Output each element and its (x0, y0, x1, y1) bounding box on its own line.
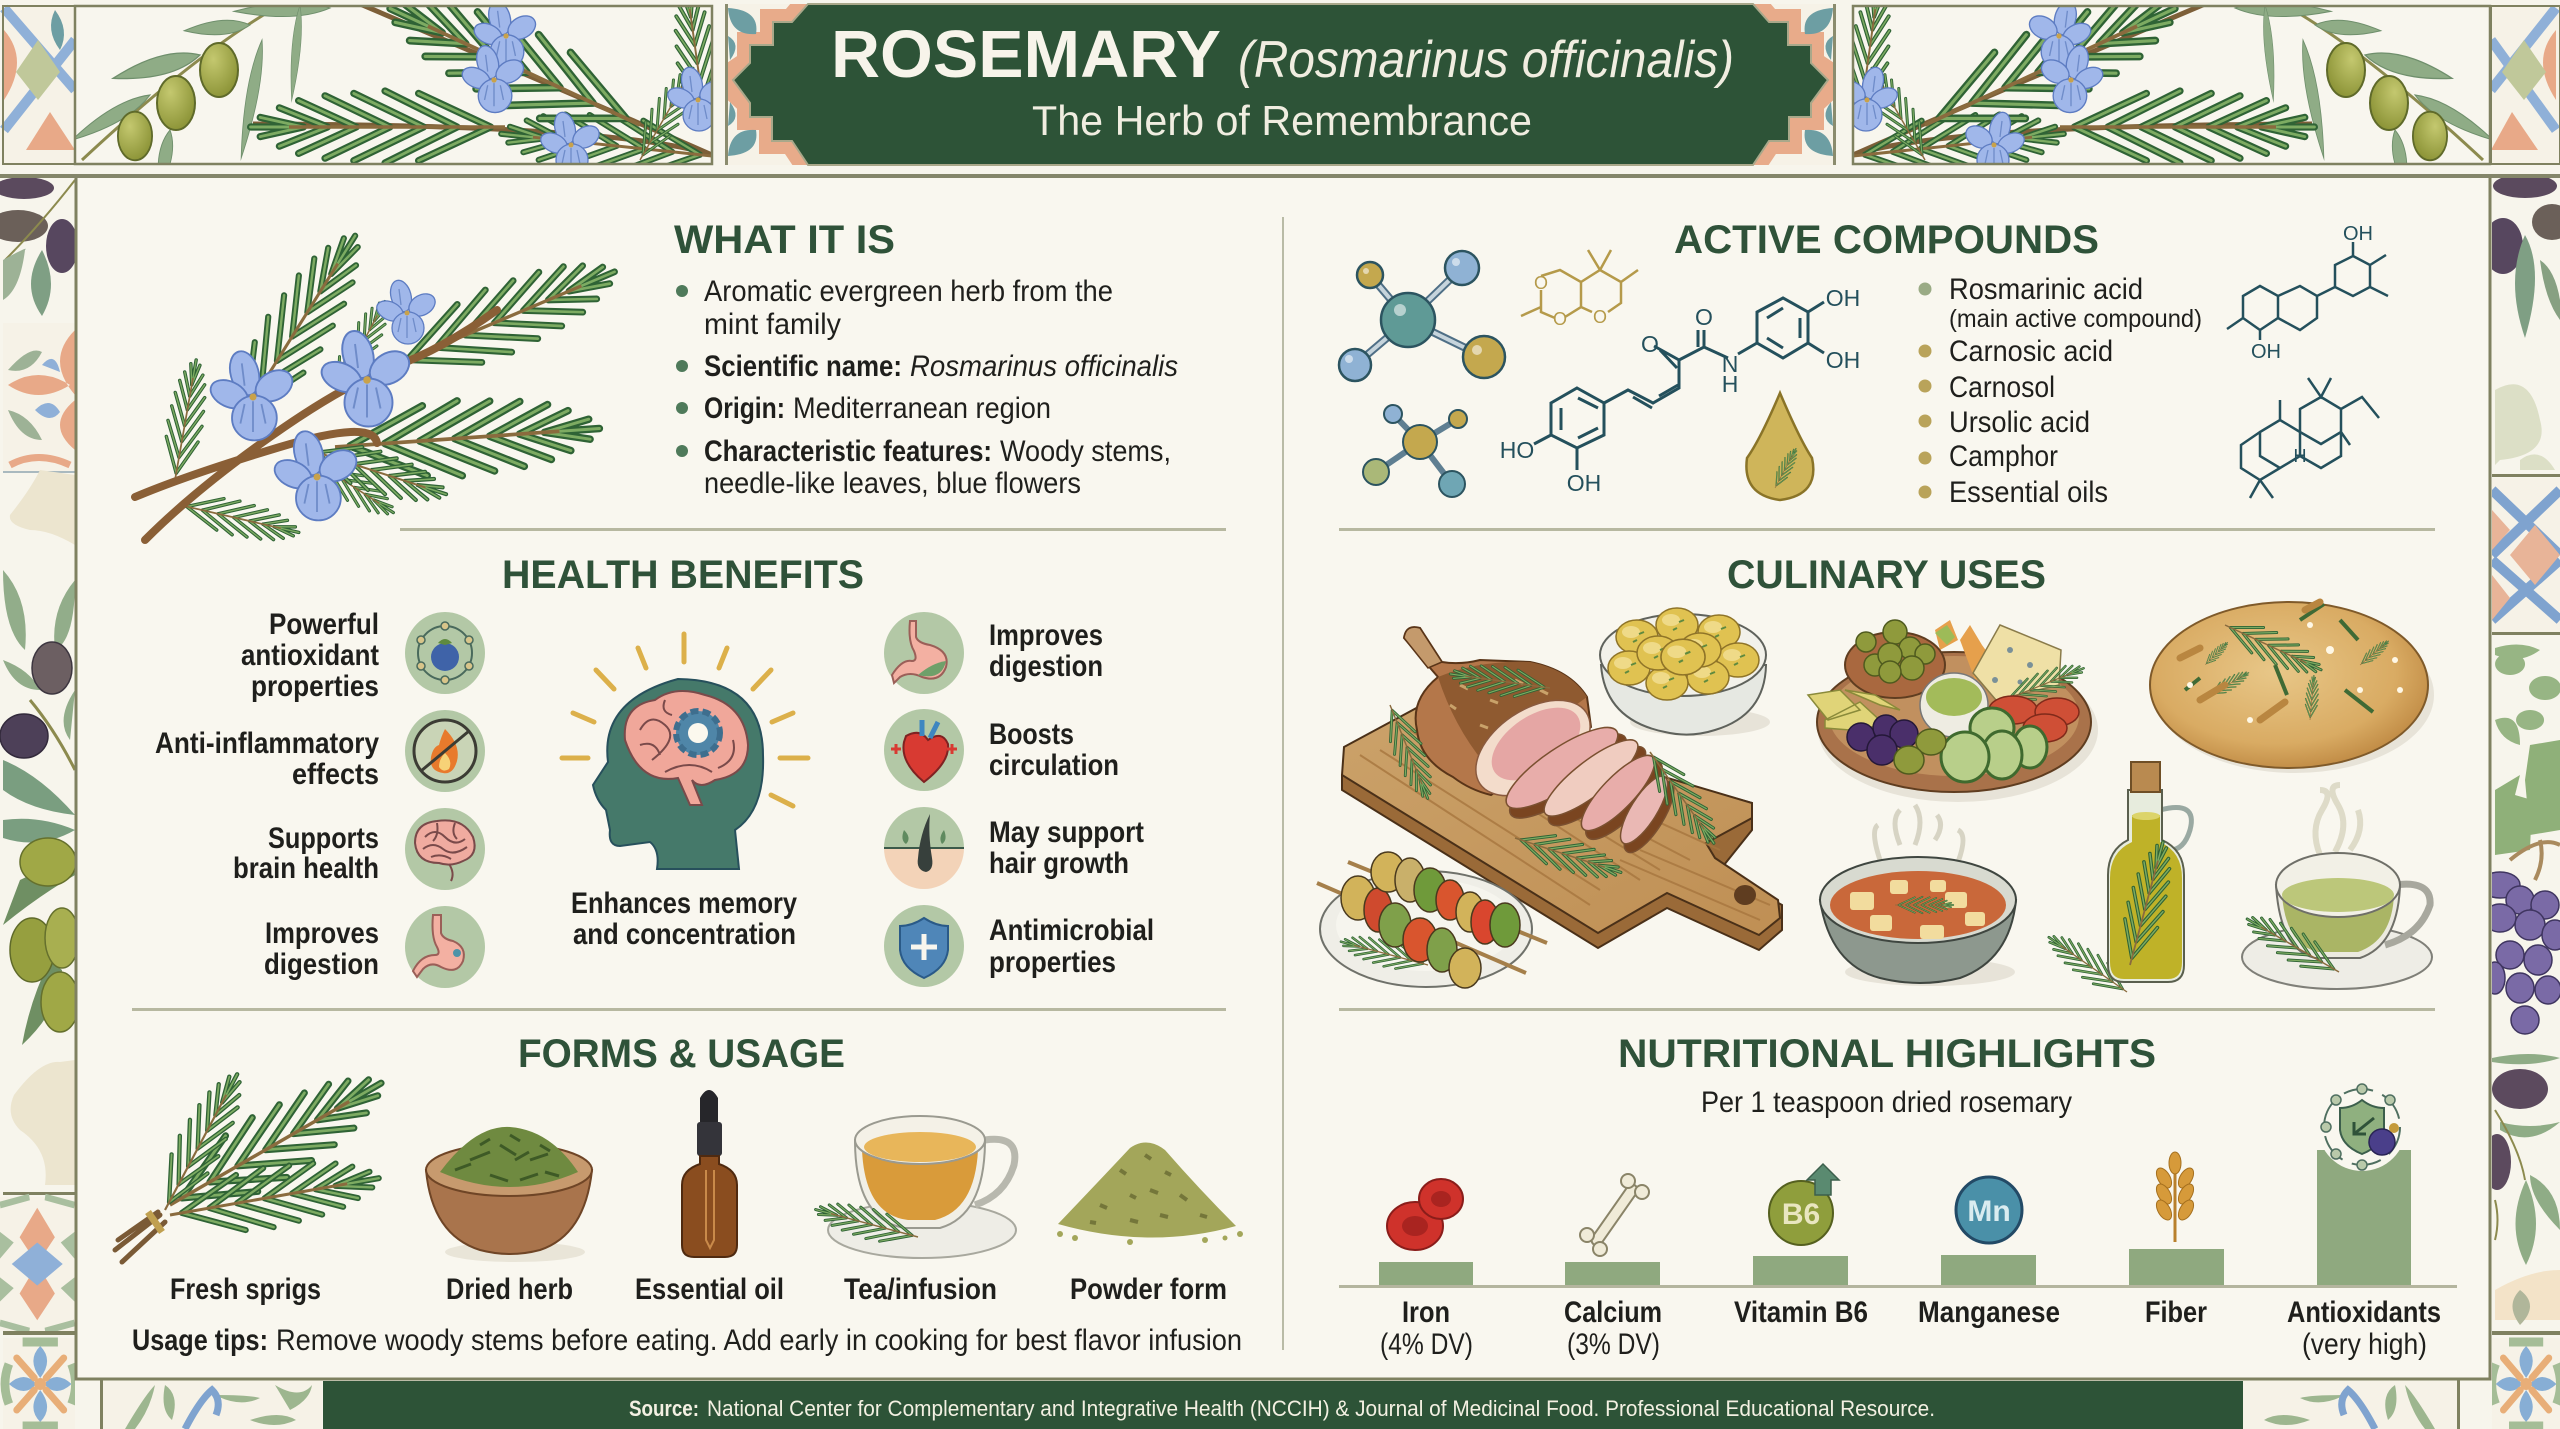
usage tips: Remove woody stems before eating. Add early in cooking for best flavor infusion (276, 1324, 1242, 1357)
icon: gold ring structure: O (1553, 309, 1567, 329)
icon: gold ring structure: O (1534, 273, 1548, 293)
icon: antioxidant berry (405, 612, 485, 694)
bullet list: needle-like leaves, blue flowers (704, 467, 1081, 500)
illustration: rosemary branch with blue flowers (135, 219, 628, 549)
title banner (733, 4, 1828, 165)
right benefit labels: Antimicrobial (989, 914, 1154, 947)
illustration: powder pile (1057, 1142, 1243, 1306)
icon: ursolic acid structure (2241, 378, 2379, 498)
illustration: roasted potatoes bowl (1600, 608, 1770, 736)
icon: heart (884, 709, 964, 791)
illustration: essential oil bottle (635, 1090, 784, 1306)
icon: hair follicle (884, 807, 964, 889)
compound list: Carnosol (1949, 371, 2055, 404)
icon: rosmarinic acid structure: HO (1500, 437, 1534, 463)
bottom band: source footer: Source: (629, 1396, 699, 1421)
header band: left ornamental tile (725, 3, 815, 165)
icon: rosmarinic acid structure: O (1641, 331, 1659, 357)
illustration: dried herb bowl: Dried herb (446, 1273, 573, 1306)
left benefit labels: Anti-inflammatory (155, 727, 379, 760)
right benefit labels: Improves (989, 619, 1103, 652)
compound list (1918, 273, 2202, 509)
header band: right rosemary and olive illustration (1835, 0, 2496, 190)
icon: stomach green (884, 612, 964, 694)
bar labels: (very high) (2302, 1328, 2427, 1361)
header band: right corner tile (2491, 6, 2560, 164)
right benefit labels: May support (989, 816, 1144, 849)
left benefit labels: antioxidant (241, 639, 379, 672)
icon: small ball-and-stick molecule (1363, 405, 1467, 497)
illustration: soup bowl (1820, 805, 2016, 986)
icon: shield with plus (884, 905, 964, 987)
right benefit labels (989, 619, 1154, 979)
icon: brain (405, 808, 485, 890)
icon: rosmarinic acid structure (1500, 285, 1860, 496)
icon: large ball-and-stick molecule (1339, 251, 1505, 381)
right benefit labels: circulation (989, 749, 1119, 782)
icon: rosmarinic acid structure: N (1722, 351, 1738, 377)
center: head with brain and gear (562, 634, 808, 869)
left benefit labels: Improves (265, 917, 379, 950)
bullet list: Characteristic features: (704, 435, 992, 468)
heading: FORMS & USAGE (518, 1032, 845, 1076)
bullet list: Woody stems, (1000, 435, 1171, 468)
right benefit labels: Boosts (989, 718, 1074, 751)
scientific name: (Rosmarinus officinalis) (1238, 31, 1734, 89)
center caption (571, 887, 797, 951)
icon: stomach (405, 906, 485, 988)
icon: flame crossed out (405, 710, 485, 792)
icon: red blood cells (1387, 1179, 1463, 1250)
heading: HEALTH BENEFITS (502, 553, 864, 597)
icon: rosmarinic acid structure: OH (1567, 470, 1601, 496)
right benefit labels: digestion (989, 650, 1103, 683)
usage tips: Usage tips: (132, 1324, 268, 1357)
bullet list: Scientific name: (704, 350, 902, 383)
bar labels: Vitamin B6 (1734, 1296, 1868, 1329)
bottom band: source footer: National Center for Complementary and Integrative Health (NCCIH) & Journal of Medicinal Food. Professional Educational Resource. (707, 1396, 1935, 1421)
icon: rosmarinic acid structure: OH (1826, 285, 1860, 311)
compound list: Rosmarinic acid (1949, 273, 2143, 306)
bullet list: Aromatic evergreen herb from the (704, 275, 1113, 308)
center caption: Enhances memory (571, 887, 797, 920)
compound list: Ursolic acid (1949, 406, 2090, 439)
center caption: and concentration (573, 918, 796, 951)
header band: left rosemary and olive illustration (69, 0, 730, 190)
bottom band: left leaf tile (100, 1380, 322, 1429)
bar labels: (3% DV) (1567, 1328, 1660, 1361)
icon: carnosic acid structure: OH (2251, 341, 2281, 363)
illustration: mediterranean platter (1808, 620, 2098, 802)
bar labels: Manganese (1918, 1296, 2060, 1329)
bar labels: Iron (1402, 1296, 1450, 1329)
compound list: Carnosic acid (1949, 335, 2113, 368)
bar labels: Antioxidants (2287, 1296, 2441, 1329)
main content panel (76, 176, 2490, 1379)
header band: left corner tile (3, 6, 75, 164)
bar labels (1380, 1296, 2441, 1361)
bullet list: Origin: (704, 392, 785, 425)
bullet list (676, 275, 1178, 500)
left benefit labels: digestion (264, 948, 379, 981)
illustration: essential oil bottle: Essential oil (635, 1273, 784, 1306)
icon: rosmarinic acid structure: O (1695, 304, 1713, 330)
icon: antioxidant shield and berry (2321, 1084, 2400, 1170)
bottom band: source footer (323, 1381, 2243, 1429)
left benefit labels: Supports (268, 822, 379, 855)
left benefit labels: effects (292, 758, 379, 791)
icon: rosmarinic acid structure: H (1722, 371, 1738, 397)
heading: NUTRITIONAL HIGHLIGHTS (1618, 1032, 2156, 1076)
left benefit labels: properties (251, 670, 379, 703)
left decorative border (0, 176, 79, 1429)
compound list: Camphor (1949, 440, 2058, 473)
illustration: fresh sprigs bundle: Fresh sprigs (170, 1273, 321, 1306)
heading: ACTIVE COMPOUNDS (1674, 218, 2099, 262)
icon: bone (1580, 1174, 1649, 1256)
panel: culinary uses (1317, 553, 2434, 1003)
right benefit labels: properties (989, 946, 1116, 979)
compound list: Essential oils (1949, 476, 2108, 509)
panel: health benefits (155, 553, 1154, 988)
illustration: roast on cutting board (1342, 627, 1782, 950)
icon: manganese: Mn (1967, 1195, 2011, 1228)
panel: nutritional highlights (1339, 1032, 2457, 1361)
icon: gold ring structure (1521, 250, 1638, 329)
bar chart (1339, 1083, 2457, 1288)
icon: vitamin B6 (1769, 1164, 1839, 1245)
bar labels: (4% DV) (1380, 1328, 1473, 1361)
illustration: skewers on plate (1317, 852, 1547, 988)
illustration: dried herb bowl (426, 1127, 592, 1306)
illustration: fresh sprigs bundle (115, 1053, 398, 1306)
icon: gold ring structure: O (1593, 307, 1607, 327)
heading: CULINARY USES (1727, 553, 2046, 597)
panel: what it is (135, 218, 1178, 549)
illustration: tea cup (812, 1116, 1016, 1306)
bullet list: mint family (704, 308, 841, 341)
left benefit labels (155, 608, 379, 981)
bottom band: right leaf tile (2243, 1380, 2460, 1429)
subtitle: Per 1 teaspoon dried rosemary (1701, 1086, 2072, 1119)
icon: rosmarinic acid structure: OH (1826, 347, 1860, 373)
panel: forms and usage (115, 1032, 1243, 1357)
icon: carnosic acid structure (2227, 223, 2388, 363)
illustration: focaccia bread (2150, 602, 2434, 773)
header band: right ornamental tile (1746, 3, 1836, 165)
illustration: herbal tea cup (2240, 785, 2432, 989)
icon: wheat (2153, 1152, 2197, 1242)
illustration: rosemary oil bottle (2041, 762, 2191, 1003)
heading: WHAT IT IS (674, 218, 895, 262)
icon: oil drop with sprig (1746, 393, 1813, 500)
icon: ursolic acid structure: H (2294, 446, 2306, 466)
right decorative border (2492, 178, 2560, 1429)
bar labels: Fiber (2145, 1296, 2207, 1329)
bar labels: Calcium (1564, 1296, 1662, 1329)
title text: ROSEMARY (831, 17, 1221, 92)
left benefit labels: Powerful (269, 608, 379, 641)
compound list: (main active compound) (1949, 305, 2202, 333)
illustration: powder pile: Powder form (1070, 1273, 1227, 1306)
subtitle: The Herb of Remembrance (1032, 97, 1532, 144)
panel: active compounds (1339, 218, 2388, 509)
icon: carnosic acid structure: OH (2343, 223, 2373, 245)
icon: vitamin B6: B6 (1782, 1198, 1820, 1231)
illustration: tea cup: Tea/infusion (844, 1273, 997, 1306)
bullet list: Rosmarinus officinalis (910, 350, 1178, 383)
icon: manganese (1956, 1177, 2022, 1243)
left benefit labels: brain health (233, 852, 379, 885)
bullet list: Mediterranean region (793, 392, 1051, 425)
right benefit labels: hair growth (989, 847, 1129, 880)
